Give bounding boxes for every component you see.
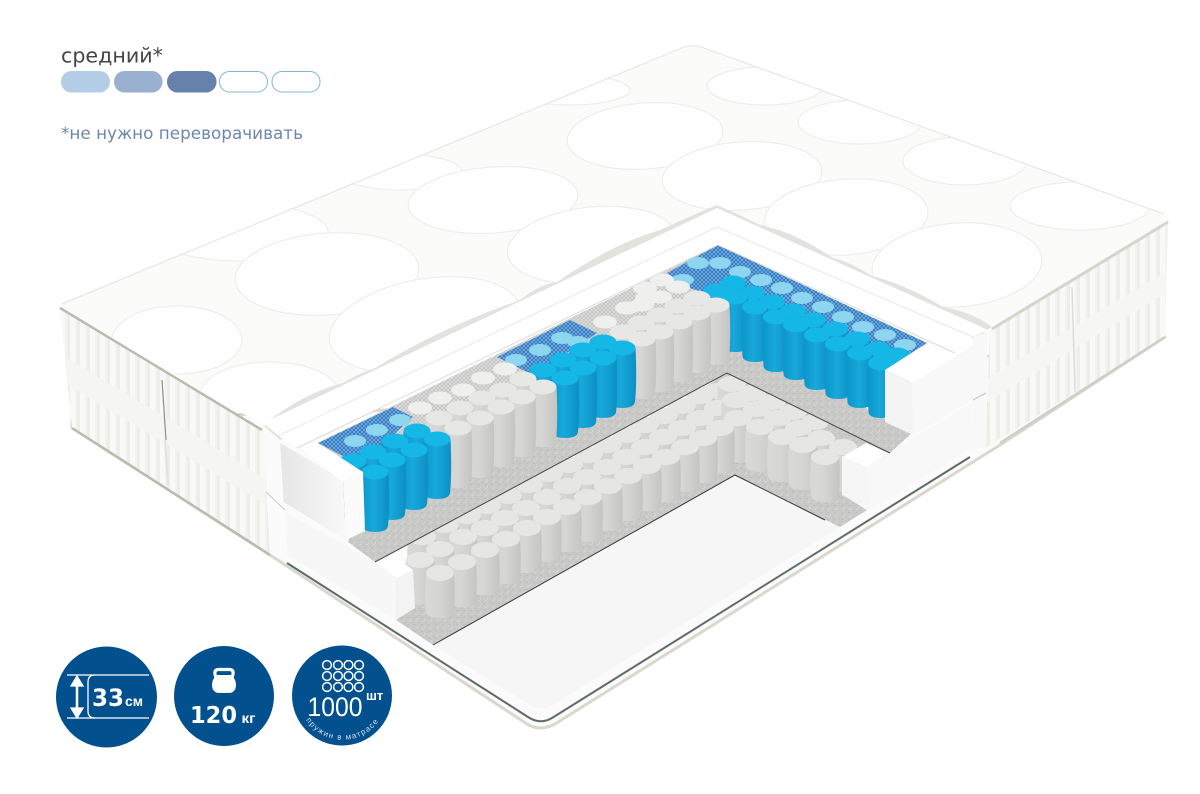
icon: height arrow and bracket	[67, 675, 149, 718]
spring caption: пружин в матрасе	[306, 718, 378, 740]
lower left foam block	[285, 512, 415, 620]
badge: 1000 springs	[292, 646, 392, 746]
icon: kettlebell	[212, 670, 236, 693]
upper right foam block	[885, 343, 973, 435]
height value: 33	[92, 684, 124, 712]
load value: 120	[190, 703, 237, 729]
badge: height 33 cm	[56, 646, 157, 748]
firmness legend	[61, 44, 320, 143]
height unit: см	[125, 693, 143, 709]
quilted top pad	[60, 46, 1168, 430]
upper springs	[339, 276, 910, 532]
pad edge shadow	[263, 190, 1000, 440]
lower felt layer	[396, 373, 890, 645]
badge: load 120 kg	[174, 646, 274, 746]
foam side strips	[263, 332, 988, 560]
spring count: 1000	[308, 692, 362, 722]
load unit: кг	[242, 710, 256, 726]
firmness label: средний*	[61, 44, 163, 68]
bottom board	[287, 400, 985, 721]
quilt pebbles	[112, 67, 1150, 428]
upper felt layer	[348, 330, 912, 562]
lower springs	[405, 376, 858, 618]
firmness scale pills	[61, 71, 320, 92]
no-flip note: *не нужно переворачивать	[61, 124, 303, 143]
upper left foam block	[280, 443, 365, 540]
left side wall	[60, 310, 270, 555]
mattress illustration	[60, 46, 1168, 728]
icon: spring grid	[323, 661, 363, 691]
spring mesh	[318, 245, 927, 480]
right side wall	[985, 220, 1168, 448]
top foam band	[263, 208, 988, 448]
mattress base edge	[72, 330, 1165, 728]
spring unit: шт	[366, 688, 383, 703]
lower right foam block	[842, 403, 973, 510]
